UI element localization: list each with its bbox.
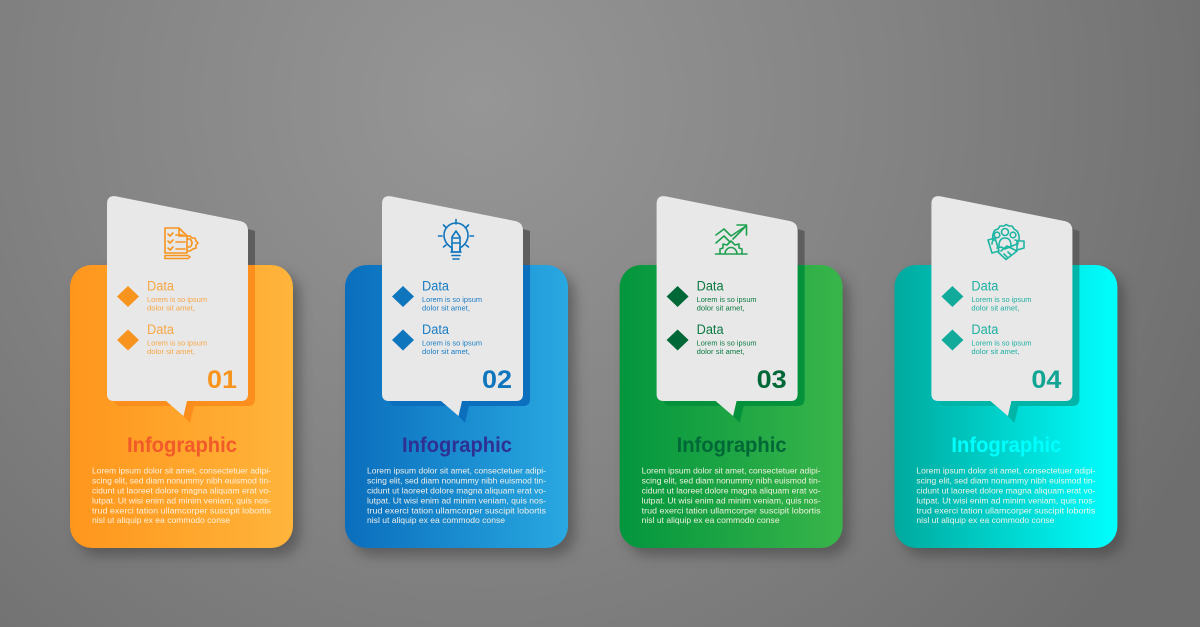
body text <box>642 466 821 525</box>
icon: diamond <box>117 286 139 307</box>
item 1: Data <box>697 278 724 294</box>
body text <box>92 466 272 525</box>
body text <box>916 466 1096 525</box>
card body <box>70 265 293 548</box>
body text: cidunt ut laoreet dolore magna aliquam erat vo- <box>92 486 271 496</box>
item 2: Data <box>697 322 724 337</box>
panel: card 01 orange <box>70 196 300 556</box>
tab shadow above card <box>248 229 255 266</box>
item 2 <box>941 322 1031 356</box>
item 2: dolor sit amet, <box>697 347 745 356</box>
body text: Lorem ipsum dolor sit amet, consectetuer adipi- <box>642 466 821 476</box>
item 2: Lorem is so ipsum <box>971 338 1031 348</box>
heading: Infographic <box>951 434 1062 457</box>
item 2: Data <box>422 322 449 337</box>
item 1: dolor sit amet, <box>971 304 1019 312</box>
speech tab drop shade <box>389 265 530 423</box>
item 2: dolor sit amet, <box>422 347 470 356</box>
item 2: dolor sit amet, <box>971 347 1019 356</box>
card body <box>345 265 568 548</box>
speech tab <box>107 196 248 416</box>
item 1 <box>941 278 1031 312</box>
item 1: dolor sit amet, <box>697 304 745 312</box>
icon: diamond <box>941 330 963 350</box>
body text <box>367 466 547 525</box>
number: 01 <box>207 366 237 394</box>
item 2 <box>392 322 482 356</box>
speech tab drop shade <box>664 265 805 423</box>
icon: diamond <box>392 286 414 307</box>
speech tab drop shade <box>938 265 1079 423</box>
card body <box>894 265 1117 548</box>
card shadow <box>627 273 850 556</box>
panel: card 02 blue <box>345 196 575 556</box>
number: 04 <box>1031 366 1061 394</box>
heading: Infographic <box>127 434 237 457</box>
icon: diamond <box>667 330 689 350</box>
icon: diamond <box>117 330 139 350</box>
panel: card 03 green <box>620 196 850 556</box>
icon: diamond <box>941 286 963 307</box>
tab shadow above card <box>1072 229 1079 266</box>
item 2: Lorem is so ipsum <box>147 338 207 348</box>
body text: lutpat. Ut wisi enim ad minim veniam, quis nos- <box>916 495 1095 505</box>
body text: nisl ut aliquip ex ea commodo conse <box>642 515 780 525</box>
body text: trud exerci tation ullamcorper suscipit lobortis <box>916 505 1096 515</box>
item 1: dolor sit amet, <box>422 304 470 312</box>
body text: cidunt ut laoreet dolore magna aliquam erat vo- <box>367 486 546 496</box>
item 1: Data <box>147 278 174 294</box>
item 2: dolor sit amet, <box>147 347 195 356</box>
item 1 <box>667 278 757 312</box>
card shadow <box>901 273 1124 556</box>
icon: diamond <box>667 286 689 307</box>
item 2: Data <box>147 322 174 337</box>
item 1: dolor sit amet, <box>147 304 195 312</box>
item 2: Data <box>971 322 999 337</box>
body text: trud exerci tation ullamcorper suscipit lobortis <box>642 505 821 515</box>
icon: diamond <box>392 330 414 350</box>
speech tab drop shade <box>114 265 255 423</box>
icon: team and handshake with gear <box>988 224 1024 260</box>
icon: checklist document with gear <box>165 228 198 258</box>
item 2: Lorem is so ipsum <box>422 338 482 348</box>
body text: Lorem ipsum dolor sit amet, consectetuer adipi- <box>367 466 546 476</box>
panel: card 04 teal <box>894 196 1124 556</box>
tab shadow above card <box>523 229 530 266</box>
item 1: Lorem is so ipsum <box>147 295 207 304</box>
icon: growth arrow over gear <box>716 225 747 254</box>
body text: trud exerci tation ullamcorper suscipit lobortis <box>367 505 547 515</box>
number: 02 <box>482 366 512 394</box>
body text: trud exerci tation ullamcorper suscipit lobortis <box>92 505 272 515</box>
tab shadow above card <box>798 229 805 266</box>
body text: scing elit, sed diam nonummy nibh euismod tin- <box>916 476 1095 486</box>
body text: nisl ut aliquip ex ea commodo conse <box>92 515 230 525</box>
speech tab <box>382 196 523 416</box>
body text: scing elit, sed diam nonummy nibh euismod tin- <box>92 476 271 486</box>
card shadow <box>77 273 300 556</box>
item 2 <box>117 322 207 356</box>
body text: scing elit, sed diam nonummy nibh euismod tin- <box>367 476 546 486</box>
item 1 <box>392 278 482 312</box>
body text: lutpat. Ut wisi enim ad minim veniam, quis nos- <box>92 495 271 505</box>
item 1: Lorem is so ipsum <box>697 295 757 304</box>
body text: lutpat. Ut wisi enim ad minim veniam, quis nos- <box>642 495 821 505</box>
item 1: Data <box>971 278 999 294</box>
item 2: Lorem is so ipsum <box>697 338 757 348</box>
body text: cidunt ut laoreet dolore magna aliquam erat vo- <box>916 486 1096 496</box>
speech tab <box>657 196 798 416</box>
card shadow <box>352 273 575 556</box>
body text: nisl ut aliquip ex ea commodo conse <box>916 515 1055 525</box>
item 1: Lorem is so ipsum <box>422 295 482 304</box>
body text: lutpat. Ut wisi enim ad minim veniam, quis nos- <box>367 495 546 505</box>
body text: Lorem ipsum dolor sit amet, consectetuer adipi- <box>92 466 271 476</box>
speech tab <box>931 196 1072 416</box>
card body <box>620 265 843 548</box>
icon: light bulb with pencil <box>438 220 474 259</box>
number: 03 <box>757 366 787 394</box>
body text: nisl ut aliquip ex ea commodo conse <box>367 515 505 525</box>
body text: scing elit, sed diam nonummy nibh euismod tin- <box>642 476 821 486</box>
body text: Lorem ipsum dolor sit amet, consectetuer adipi- <box>916 466 1095 476</box>
item 1: Data <box>422 278 449 294</box>
body text: cidunt ut laoreet dolore magna aliquam erat vo- <box>642 486 821 496</box>
heading: Infographic <box>402 434 512 457</box>
item 1 <box>117 278 207 312</box>
item 2 <box>667 322 757 356</box>
heading: Infographic <box>677 434 787 457</box>
item 1: Lorem is so ipsum <box>971 295 1031 304</box>
